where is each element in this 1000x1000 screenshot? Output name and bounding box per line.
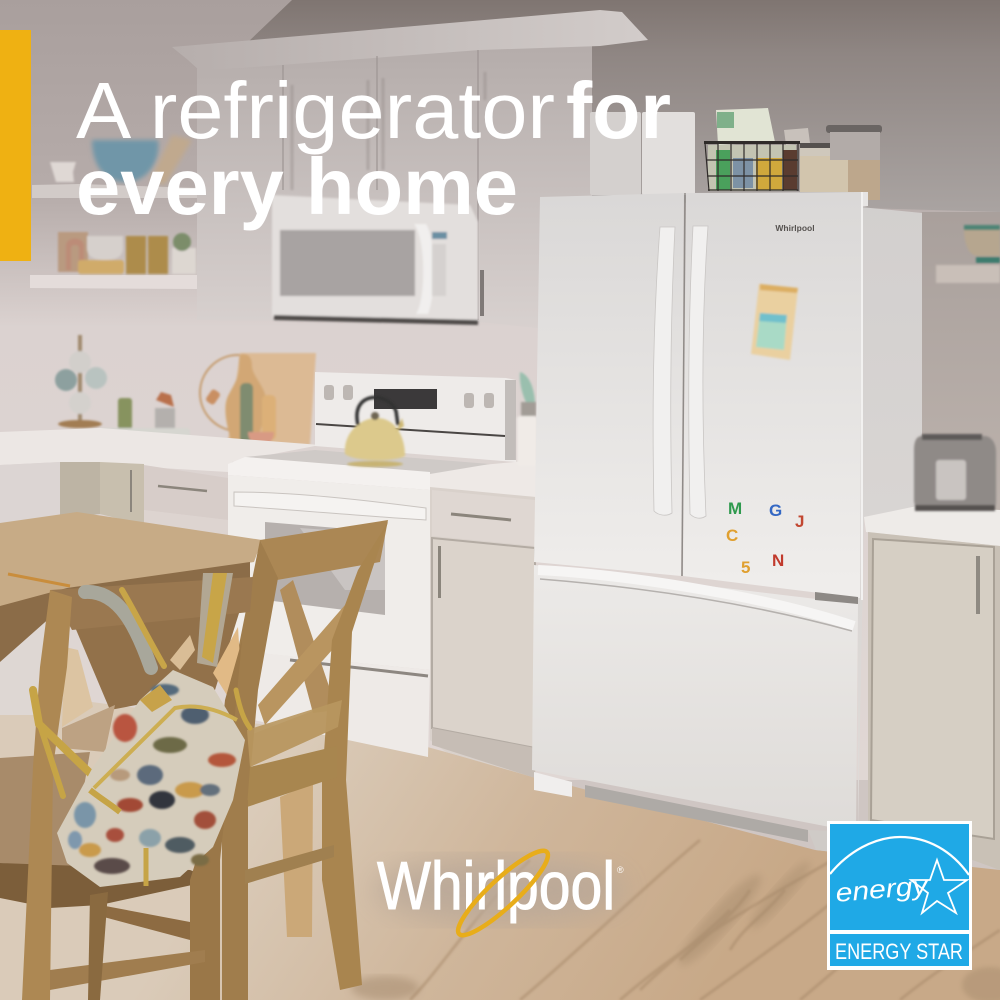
top rail <box>260 520 388 580</box>
seat rail <box>247 700 342 767</box>
base counters and left cabinets <box>0 428 536 778</box>
wood floor <box>0 690 1000 1000</box>
seat fabric <box>62 705 115 752</box>
left open shelves <box>30 135 198 289</box>
ENERGY STAR badge: ENERGY STAR <box>835 939 963 964</box>
Whirlpool logo: ® <box>617 865 624 875</box>
back splat <box>72 605 240 710</box>
X-back slats <box>280 580 337 713</box>
straps <box>33 590 250 810</box>
magnets: N <box>772 551 784 570</box>
right door handle <box>689 226 708 518</box>
left post <box>22 590 72 1000</box>
right counter with cabinet <box>864 505 1000 870</box>
stretcher <box>245 845 334 884</box>
front leg <box>222 800 248 1000</box>
french door refrigerator <box>532 192 922 855</box>
ENERGY STAR badge <box>827 821 972 970</box>
left post <box>222 540 278 800</box>
light opening <box>62 647 93 727</box>
seat rail <box>0 863 215 908</box>
left door <box>534 193 684 576</box>
blurred patch behind logo <box>375 858 625 922</box>
magnets <box>726 499 804 577</box>
right wall shelf and bowl <box>936 225 1000 283</box>
dining table <box>0 512 262 662</box>
items by fridge: utensil crock <box>517 372 537 466</box>
right post <box>190 640 242 1000</box>
magnets: J <box>795 512 804 531</box>
magnets: C <box>726 526 738 545</box>
base feet and vent <box>534 772 572 797</box>
right door <box>683 192 862 598</box>
fridge side panel <box>858 207 922 830</box>
zipper and pocket <box>94 706 237 788</box>
seat cushion <box>250 705 338 767</box>
Whirlpool logo: Whirlpool <box>377 848 615 924</box>
lower freezer drawer <box>532 565 858 832</box>
kitchen wall background <box>0 0 1000 780</box>
body <box>57 670 245 887</box>
microwave <box>272 195 478 325</box>
top rail <box>50 577 253 630</box>
backsplash counter items: mug tree, cutting boards <box>55 335 316 446</box>
Whirlpool logo <box>377 842 624 944</box>
stretchers <box>100 905 190 940</box>
title: every home <box>76 142 518 231</box>
white range <box>228 372 516 757</box>
sticky note <box>751 284 798 360</box>
title <box>76 66 671 231</box>
paper towels <box>590 112 695 195</box>
right post <box>322 522 388 990</box>
left lower wall behind table <box>0 600 60 715</box>
upper cabinets <box>172 10 648 328</box>
far wooden chair <box>222 520 388 1000</box>
snack basket and jars <box>704 108 882 200</box>
ENERGY STAR badge: energy <box>834 870 931 908</box>
print <box>68 684 236 874</box>
backpack <box>33 573 250 887</box>
left door handle <box>653 227 675 515</box>
magnets: 5 <box>741 558 750 577</box>
back leg <box>280 783 313 937</box>
kettle <box>345 397 405 467</box>
drawer handle <box>538 570 854 626</box>
title: for <box>566 66 671 155</box>
magnets: M <box>728 499 742 518</box>
brand badge: Whirlpool <box>775 223 815 233</box>
toaster <box>914 434 996 511</box>
magnets: G <box>769 501 782 520</box>
hinge <box>815 592 858 604</box>
near wooden chair <box>0 577 253 1000</box>
title: A refrigerator <box>76 66 555 155</box>
accent bar <box>0 30 31 261</box>
